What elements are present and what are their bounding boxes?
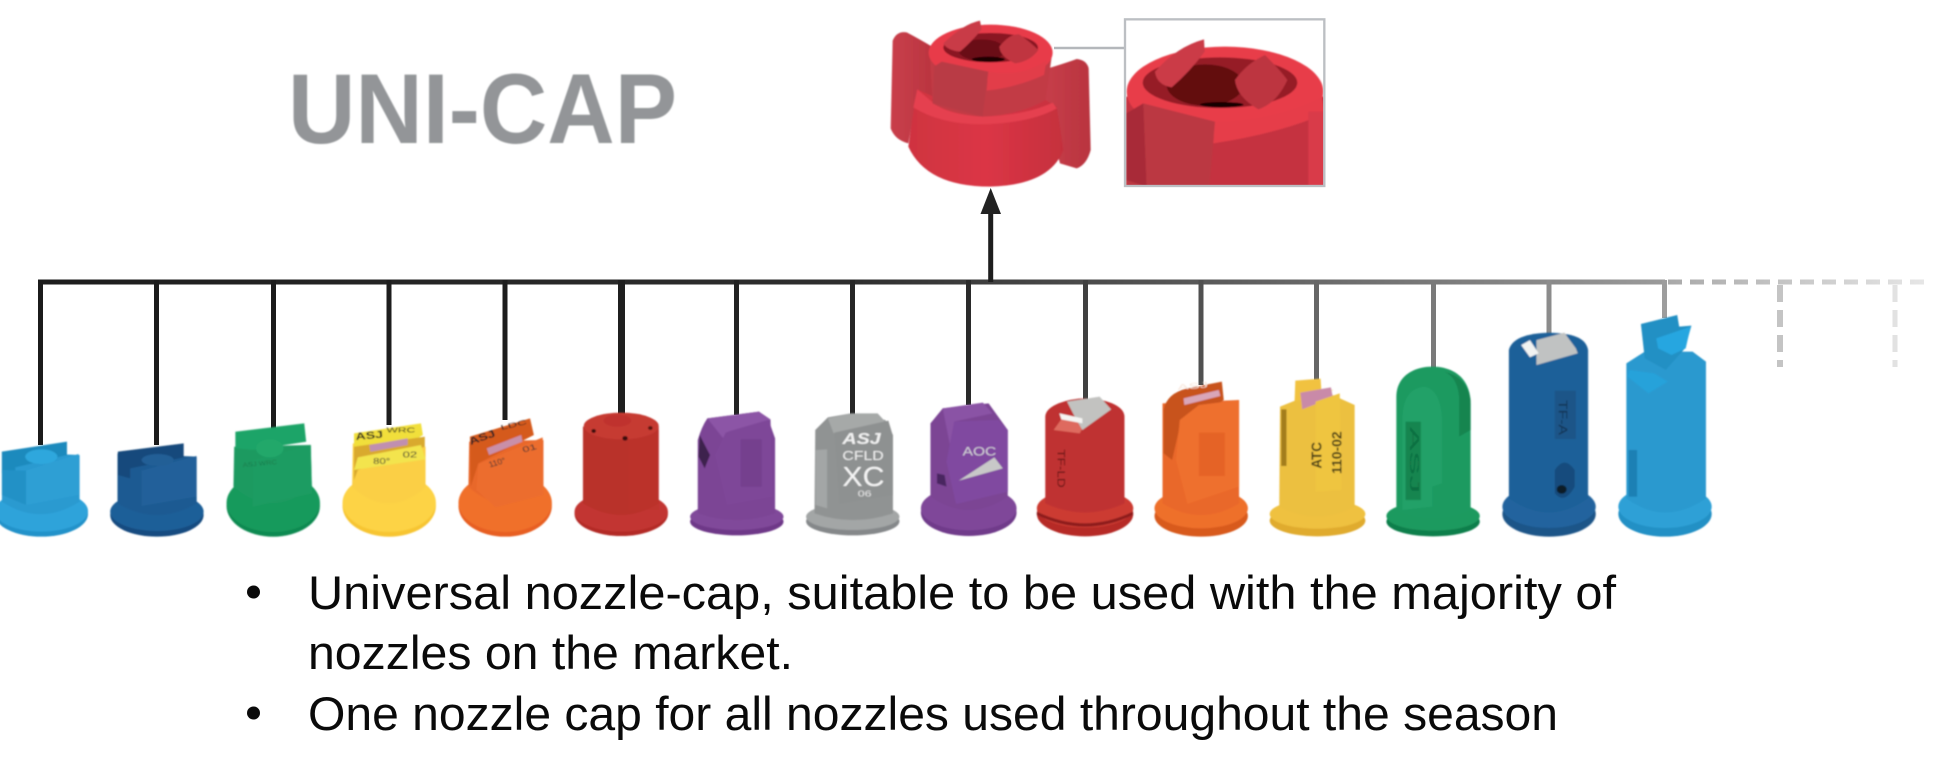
nozzle 9: purple AOC nozzle bbox=[921, 403, 1017, 536]
nozzle 5: orange flat fan bbox=[458, 418, 552, 537]
nozzle 7: purple air induction bbox=[690, 412, 783, 535]
nozzle 10: red TF-LD nozzle bbox=[1037, 397, 1133, 536]
nozzle 10: red TF-LD nozzle: TF-LD bbox=[1054, 449, 1067, 488]
nozzle 1: light blue flat fan bbox=[0, 442, 88, 537]
bullet 1: Universal nozzle-cap, suitable to be used with the majority of bbox=[308, 566, 1617, 619]
inset: close-up of cap opening bbox=[1125, 19, 1326, 187]
nozzle 3: green flat fan bbox=[227, 423, 320, 537]
nozzle 3: green flat fan: ASJ WRC bbox=[242, 459, 277, 469]
nozzle 14: blue TF-A nozzle bbox=[1502, 333, 1596, 537]
nozzle 8: grey XC flat fan: ASJ bbox=[841, 431, 882, 448]
nozzle 4: yellow flat fan bbox=[343, 423, 436, 537]
nozzle 9: purple AOC nozzle: AOC bbox=[963, 444, 996, 458]
nozzle 8: grey XC flat fan: CFLD bbox=[842, 449, 884, 463]
nozzle 6: red hollow cone bbox=[575, 413, 668, 536]
nozzle 8: grey XC flat fan bbox=[806, 413, 899, 535]
bullet 1 bbox=[247, 566, 1617, 679]
nozzles row, middle group bbox=[575, 397, 1133, 536]
bullet 2: One nozzle cap for all nozzles used throughout the season bbox=[308, 687, 1558, 740]
nozzles row, right group bbox=[1154, 315, 1712, 537]
nozzle 5: orange flat fan: 01 bbox=[521, 442, 538, 454]
nozzle 13: green dome nozzle bbox=[1386, 367, 1480, 536]
zoom line from cap to inset bbox=[1054, 47, 1126, 49]
nozzle 12: yellow ATC nozzle bbox=[1270, 379, 1365, 536]
nozzle 4: yellow flat fan: 80° bbox=[373, 457, 390, 466]
nozzle 4: yellow flat fan: WRC bbox=[387, 426, 416, 435]
connector tree: horizontal bus with stems bbox=[38, 280, 1925, 445]
title: UNI-CAP bbox=[288, 53, 677, 164]
nozzle 13: green dome nozzle: ASJ bbox=[1407, 427, 1422, 493]
nozzle 5: orange flat fan: ASJ bbox=[467, 428, 497, 448]
arrow up to cap bbox=[980, 188, 1001, 282]
red uni-cap product bbox=[891, 21, 1091, 187]
nozzle 11: orange induction bbox=[1154, 380, 1248, 537]
nozzle 12: yellow ATC nozzle: ATC bbox=[1309, 442, 1325, 469]
nozzle 4: yellow flat fan: 02 bbox=[403, 450, 417, 459]
nozzle 14: blue TF-A nozzle: TF-A bbox=[1555, 400, 1568, 435]
nozzle 2: dark blue flat fan bbox=[110, 443, 204, 537]
nozzle 4: yellow flat fan: ASJ bbox=[355, 429, 384, 443]
nozzle 11: orange induction: ASJ bbox=[1177, 380, 1209, 392]
bullet list text bbox=[247, 566, 1617, 740]
nozzle 8: grey XC flat fan: XC bbox=[842, 462, 885, 493]
nozzle 12: yellow ATC nozzle: 110-02 bbox=[1329, 431, 1345, 474]
nozzle 5: orange flat fan: 110° bbox=[487, 456, 507, 469]
nozzle 5: orange flat fan: LDC bbox=[500, 419, 528, 432]
nozzle 8: grey XC flat fan: 06 bbox=[858, 489, 872, 499]
bullet 1: nozzles on the market. bbox=[308, 626, 793, 679]
nozzles row, left group bbox=[0, 418, 552, 537]
nozzle 15: light blue tall nozzle bbox=[1618, 315, 1712, 537]
